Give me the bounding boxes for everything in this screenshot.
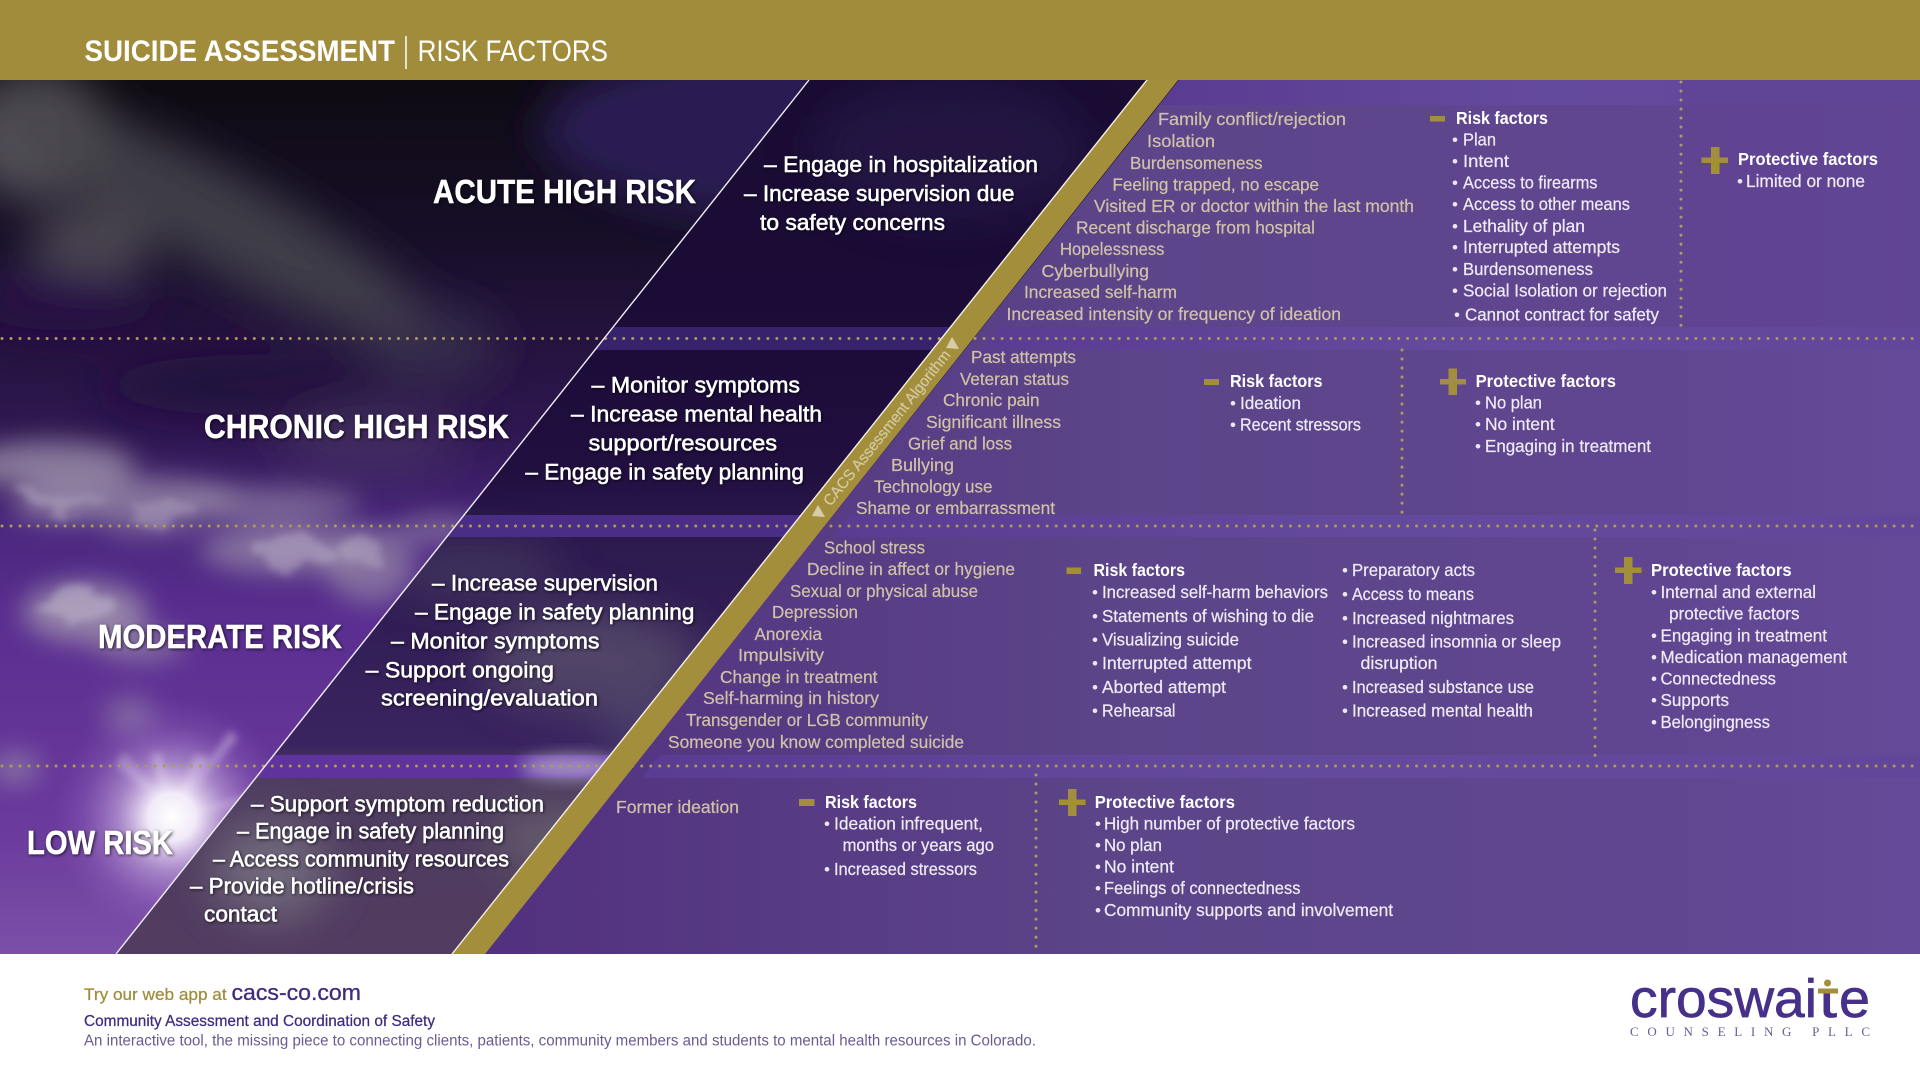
risk factors: low: •: [824, 860, 830, 879]
warning signs: acute: Family conflict/rejection: [1158, 109, 1346, 129]
warning signs: chronic: Significant illness: [926, 412, 1061, 432]
risk factors: chronic: Recent stressors: [1240, 415, 1361, 435]
warning signs: chronic: Past attempts: [971, 347, 1076, 367]
actions: chronic: [525, 372, 822, 484]
risk factors: chronic: Risk factors: [1230, 371, 1323, 391]
protective factors: chronic: Engaging in treatment: [1485, 436, 1651, 456]
risk factors: moderate: •: [1092, 654, 1098, 673]
title: SUICIDE ASSESSMENT: [84, 35, 395, 68]
actions: chronic: support/resources: [588, 430, 777, 456]
actions: acute: – Engage in hospitalization: [764, 152, 1038, 177]
warning signs: acute: Recent discharge from hospital: [1076, 218, 1315, 238]
risk factors: acute: •: [1452, 130, 1458, 150]
actions: acute: [744, 152, 1038, 235]
subtitle: RISK FACTORS: [418, 35, 608, 68]
middle action panel: [100, 80, 1160, 954]
warning signs: moderate: Depression: [772, 602, 858, 622]
protective factors: low: Community supports and involvement: [1104, 900, 1393, 920]
risk factors: chronic: •: [1230, 394, 1236, 413]
risk factors: moderate: •: [1092, 702, 1098, 720]
protective factors: acute: •: [1737, 172, 1743, 191]
protective factors: low: •: [1095, 836, 1101, 855]
icon: plus: [1702, 147, 1728, 174]
protective factors: chronic: •: [1475, 394, 1481, 412]
risk factors: moderate: Preparatory acts: [1352, 560, 1475, 580]
protective factors: low: •: [1095, 857, 1101, 876]
risk factors: acute: Interrupted attempts: [1463, 237, 1620, 257]
protective factors: low: No plan: [1104, 835, 1162, 855]
warning signs: chronic: Shame or embarrassment: [856, 498, 1055, 518]
warning signs: acute: [1006, 109, 1414, 324]
warning signs: moderate: Decline in affect or hygiene: [807, 559, 1015, 579]
risk factors: moderate: •: [1342, 702, 1348, 720]
warning signs: moderate: Change in treatment: [720, 667, 878, 687]
icon: plus: [1615, 557, 1642, 584]
actions: chronic: – Engage in safety planning: [525, 460, 804, 484]
logo: t: [1819, 969, 1837, 1029]
warning signs: chronic: Chronic pain: [943, 390, 1040, 410]
risk factors: moderate: Statements of wishing to die: [1102, 606, 1314, 626]
protective factors: moderate: Supports: [1660, 690, 1729, 710]
label: moderate: MODERATE RISK: [98, 618, 342, 655]
warning signs: chronic: Grief and loss: [908, 434, 1012, 454]
actions: low: – Provide hotline/crisis: [190, 874, 414, 898]
protective factors: low: •: [1095, 814, 1101, 833]
risk factors: acute: Lethality of plan: [1463, 216, 1585, 236]
web app call to action: Try our web app at: [84, 985, 227, 1004]
risk factors: moderate: Increased mental health: [1352, 700, 1533, 720]
actions: low: – Support symptom reduction: [251, 792, 544, 816]
risk factors: moderate: Interrupted attempt: [1102, 653, 1252, 673]
protective factors: moderate: Connectedness: [1660, 668, 1776, 688]
risk factors: low: Ideation infrequent,: [834, 813, 983, 833]
risk factors: acute: •: [1454, 305, 1460, 324]
risk factors: acute: Burdensomeness: [1463, 259, 1593, 279]
risk factors: acute: [1430, 108, 1667, 324]
risk factors: moderate: •: [1092, 583, 1098, 602]
label: chronic: CHRONIC HIGH RISK: [204, 408, 509, 445]
protective factors: moderate: •: [1651, 691, 1657, 710]
risk factors: acute: Access to firearms: [1463, 172, 1598, 192]
risk factors: acute: Risk factors: [1456, 108, 1548, 128]
protective factors: moderate: [1615, 557, 1847, 732]
footer: [0, 954, 1920, 1080]
actions: chronic: – Increase mental health: [571, 402, 822, 426]
risk factors: acute: •: [1452, 195, 1458, 214]
warning signs: acute: Isolation: [1147, 131, 1215, 151]
warning signs: moderate: Impulsivity: [738, 645, 824, 665]
actions: acute: – Increase supervision due: [744, 181, 1014, 206]
risk factors: moderate: •: [1092, 630, 1098, 650]
risk factors: low: [799, 792, 994, 879]
protective factors: acute: [1702, 147, 1878, 191]
risk factors: moderate: Increased nightmares: [1352, 608, 1514, 628]
warning signs: chronic: Technology use: [874, 477, 992, 497]
warning signs: moderate: Sexual or physical abuse: [790, 581, 978, 601]
protective factors: moderate: Protective factors: [1651, 560, 1792, 580]
protective factors: moderate: Internal and external: [1660, 582, 1816, 602]
risk factors: chronic: [1204, 371, 1361, 435]
risk factors: acute: •: [1452, 260, 1458, 279]
icon: minus: [1430, 116, 1445, 122]
logo: COUNSELING PLLC: [1630, 1024, 1870, 1039]
risk factors: moderate: •: [1342, 633, 1348, 652]
actions: chronic: – Monitor symptoms: [592, 372, 800, 398]
protective factors: chronic: •: [1475, 415, 1481, 434]
protective factors: chronic: Protective factors: [1476, 371, 1616, 391]
organisation name: Community Assessment and Coordination of Safety: [84, 1013, 435, 1030]
warning signs: acute: Hopelessness: [1060, 239, 1165, 259]
risk factors: acute: Social Isolation or rejection: [1463, 281, 1667, 301]
risk factors: moderate: •: [1092, 607, 1098, 626]
risk factors: acute: •: [1452, 217, 1458, 236]
warning signs: chronic: Bullying: [891, 455, 954, 475]
icon: plus: [1059, 789, 1086, 816]
risk factors: low: •: [824, 814, 830, 833]
risk factors: acute: Access to other means: [1463, 194, 1630, 214]
warning signs: acute: Burdensomeness: [1130, 153, 1263, 173]
protective factors: moderate: Engaging in treatment: [1660, 625, 1827, 645]
actions: moderate: – Engage in safety planning: [415, 600, 694, 624]
risk factors: acute: •: [1452, 174, 1458, 192]
risk factors: moderate: Risk factors: [1094, 560, 1185, 580]
warning signs: acute: Cyberbullying: [1042, 261, 1149, 281]
warning signs: acute: Feeling trapped, no escape: [1112, 174, 1319, 194]
logo: e: [1839, 969, 1870, 1029]
warning signs: moderate: Transgender or LGB community: [686, 710, 928, 730]
warning signs: low: Former ideation: [616, 797, 739, 817]
risk factors: moderate: disruption: [1360, 653, 1438, 673]
risk factors: moderate: Increased insomnia or sleep: [1352, 632, 1561, 652]
risk factors: acute: •: [1452, 152, 1458, 171]
icon: minus: [799, 799, 814, 806]
risk factors: moderate: Aborted attempt: [1102, 677, 1226, 697]
actions: moderate: – Support ongoing: [366, 658, 554, 682]
logo: croswai: [1630, 969, 1817, 1029]
actions: low: – Access community resources: [213, 846, 509, 872]
protective factors: moderate: •: [1651, 713, 1657, 732]
risk factors: moderate: [1066, 560, 1561, 720]
protective factors: moderate: •: [1651, 648, 1657, 667]
warning signs: chronic: [856, 347, 1076, 518]
protective factors: moderate: Belongingness: [1660, 712, 1770, 732]
warning signs: moderate: Someone you know completed suicide: [668, 732, 964, 752]
description: An interactive tool, the missing piece to connecting clients, patients, community members and students to mental health resources in Colorado.: [84, 1032, 1036, 1050]
warning signs: acute: Increased intensity or frequency of ideation: [1006, 304, 1341, 324]
risk factors: acute: •: [1452, 238, 1458, 257]
protective factors: low: Protective factors: [1095, 792, 1235, 812]
logo: [1630, 978, 1870, 1036]
actions: low: [190, 792, 544, 926]
risk factors: acute: Plan: [1463, 130, 1496, 150]
actions: moderate: screening/evaluation: [381, 686, 598, 710]
protective factors: moderate: •: [1651, 669, 1657, 688]
label: low: LOW RISK: [27, 824, 173, 861]
risk factors: moderate: •: [1342, 678, 1348, 697]
risk factors: moderate: •: [1092, 678, 1098, 697]
icon: plus: [1440, 368, 1466, 395]
protective factors: low: No intent: [1104, 856, 1174, 876]
icon: minus: [1066, 568, 1081, 574]
risk factors: chronic: •: [1230, 416, 1236, 435]
arrow: down: [812, 505, 825, 517]
protective factors: chronic: [1440, 368, 1651, 456]
protective factors: low: •: [1095, 879, 1101, 898]
protective factors: moderate: •: [1651, 583, 1657, 602]
warning signs: moderate: [668, 538, 1015, 752]
protective factors: moderate: protective factors: [1669, 604, 1800, 624]
risk factors: moderate: •: [1342, 585, 1348, 604]
actions: low: – Engage in safety planning: [237, 818, 504, 844]
sky background panel: [0, 80, 1179, 954]
warning signs: acute: Visited ER or doctor within the last month: [1094, 196, 1414, 216]
diagonal white line: [116, 80, 809, 954]
protective factors: low: [1059, 789, 1393, 920]
protective factors: acute: Protective factors: [1738, 149, 1878, 169]
arrow: up: [946, 337, 959, 349]
warning signs: moderate: School stress: [824, 538, 925, 558]
gold algorithm band: [452, 79, 1179, 954]
risk factors: acute: Intent: [1463, 151, 1509, 171]
protective factors: moderate: Medication management: [1660, 647, 1847, 667]
protective factors: chronic: No intent: [1485, 414, 1555, 434]
band label: CACS Assessment Algorithm: [820, 347, 954, 510]
risk factors: moderate: •: [1342, 561, 1348, 580]
label: acute: ACUTE HIGH RISK: [433, 173, 696, 210]
risk factors: moderate: Increased substance use: [1352, 677, 1534, 697]
actions: low: contact: [204, 902, 278, 926]
protective factors: acute: Limited or none: [1746, 171, 1865, 191]
risk factors: low: Risk factors: [825, 792, 917, 812]
risk factors: acute: •: [1452, 282, 1458, 301]
protective factors: moderate: •: [1651, 626, 1657, 645]
actions: acute: to safety concerns: [760, 210, 945, 235]
protective factors: low: High number of protective factors: [1104, 813, 1355, 833]
risk factors: low: months or years ago: [843, 835, 994, 855]
risk factors: moderate: Visualizing suicide: [1102, 630, 1239, 650]
risk factors: acute: Cannot contract for safety: [1465, 304, 1659, 324]
risk factors: moderate: Access to means: [1352, 584, 1474, 604]
risk factors: moderate: Rehearsal: [1102, 700, 1176, 720]
risk factors: moderate: Increased self-harm behaviors: [1102, 582, 1328, 602]
warning signs: moderate: Self-harming in history: [703, 688, 879, 708]
warning signs: acute: Increased self-harm: [1024, 282, 1177, 302]
actions: moderate: [366, 570, 694, 710]
web app url: cacs-co.com: [232, 980, 361, 1005]
protective factors: chronic: No plan: [1485, 392, 1542, 412]
warning signs: chronic: Veteran status: [960, 369, 1069, 389]
warning signs: moderate: Anorexia: [754, 624, 822, 644]
right risk factor panel: [485, 80, 1920, 954]
risk level labels: [27, 173, 696, 861]
protective factors: chronic: •: [1475, 437, 1481, 456]
risk factors: low: Increased stressors: [834, 859, 977, 879]
risk factors: chronic: Ideation: [1240, 393, 1301, 413]
header bar: [0, 0, 1920, 80]
actions: moderate: – Increase supervision: [432, 570, 658, 596]
protective factors: low: •: [1095, 901, 1101, 920]
risk factors: moderate: •: [1342, 609, 1348, 628]
actions: moderate: – Monitor symptoms: [391, 628, 600, 654]
protective factors: low: Feelings of connectedness: [1104, 878, 1301, 898]
icon: minus: [1204, 379, 1219, 385]
